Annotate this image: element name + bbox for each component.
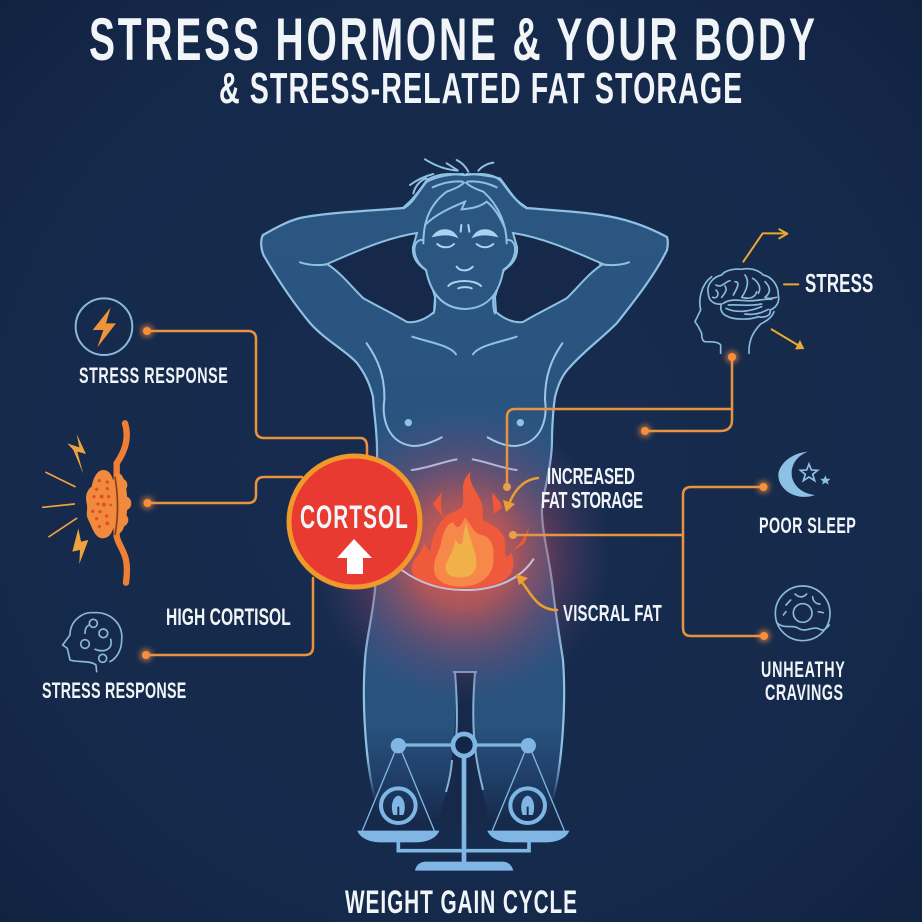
belly glow (312, 405, 612, 705)
connector lines (146, 331, 764, 655)
label: increased fat storage (541, 464, 643, 514)
head and face (300, 159, 629, 446)
left arm gap (327, 233, 435, 322)
label: weight gain cycle: WEIGHT GAIN CYCLE (345, 885, 577, 920)
connector dots (140, 325, 770, 661)
label: stress: STRESS (805, 268, 873, 298)
icon: adrenal gland (43, 423, 131, 583)
label: increased fat storage: FAT STORAGE (541, 488, 643, 514)
right arm gap (495, 233, 603, 322)
label: stress response bottom: STRESS RESPONSE (42, 678, 186, 703)
label: unhealthy cravings: CRAVINGS (765, 680, 843, 705)
title: STRESS HORMONE & YOUR BODY (89, 5, 815, 73)
label: visceral fat: VISCRAL FAT (563, 601, 662, 627)
icon: balance scale (357, 734, 569, 871)
icon: moon and stars (778, 452, 830, 497)
cortisol badge: CORTSOL (300, 500, 408, 535)
label: high cortisol: HIGH CORTISOL (166, 605, 291, 631)
label: increased fat storage: INCREASED (547, 464, 635, 490)
subtitle: & STRESS-RELATED FAT STORAGE (219, 63, 742, 112)
label: unhealthy cravings: UNHEATHY (761, 657, 845, 682)
icon: lightning circle (76, 298, 132, 355)
left icons (43, 298, 132, 672)
human body figure (261, 159, 668, 825)
icon: donut (775, 586, 830, 641)
label: unhealthy cravings (761, 657, 845, 705)
label: poor sleep: POOR SLEEP (759, 513, 856, 538)
icon: up arrow (337, 539, 372, 574)
leg gap (438, 672, 490, 825)
label: stress response top: STRESS RESPONSE (79, 363, 228, 388)
icon: brain with arrows (695, 229, 804, 353)
flames and abdomen lines (402, 459, 533, 590)
icon: head with molecules (63, 613, 122, 672)
connector arrowheads (503, 500, 528, 585)
cortisol badge (289, 456, 420, 587)
